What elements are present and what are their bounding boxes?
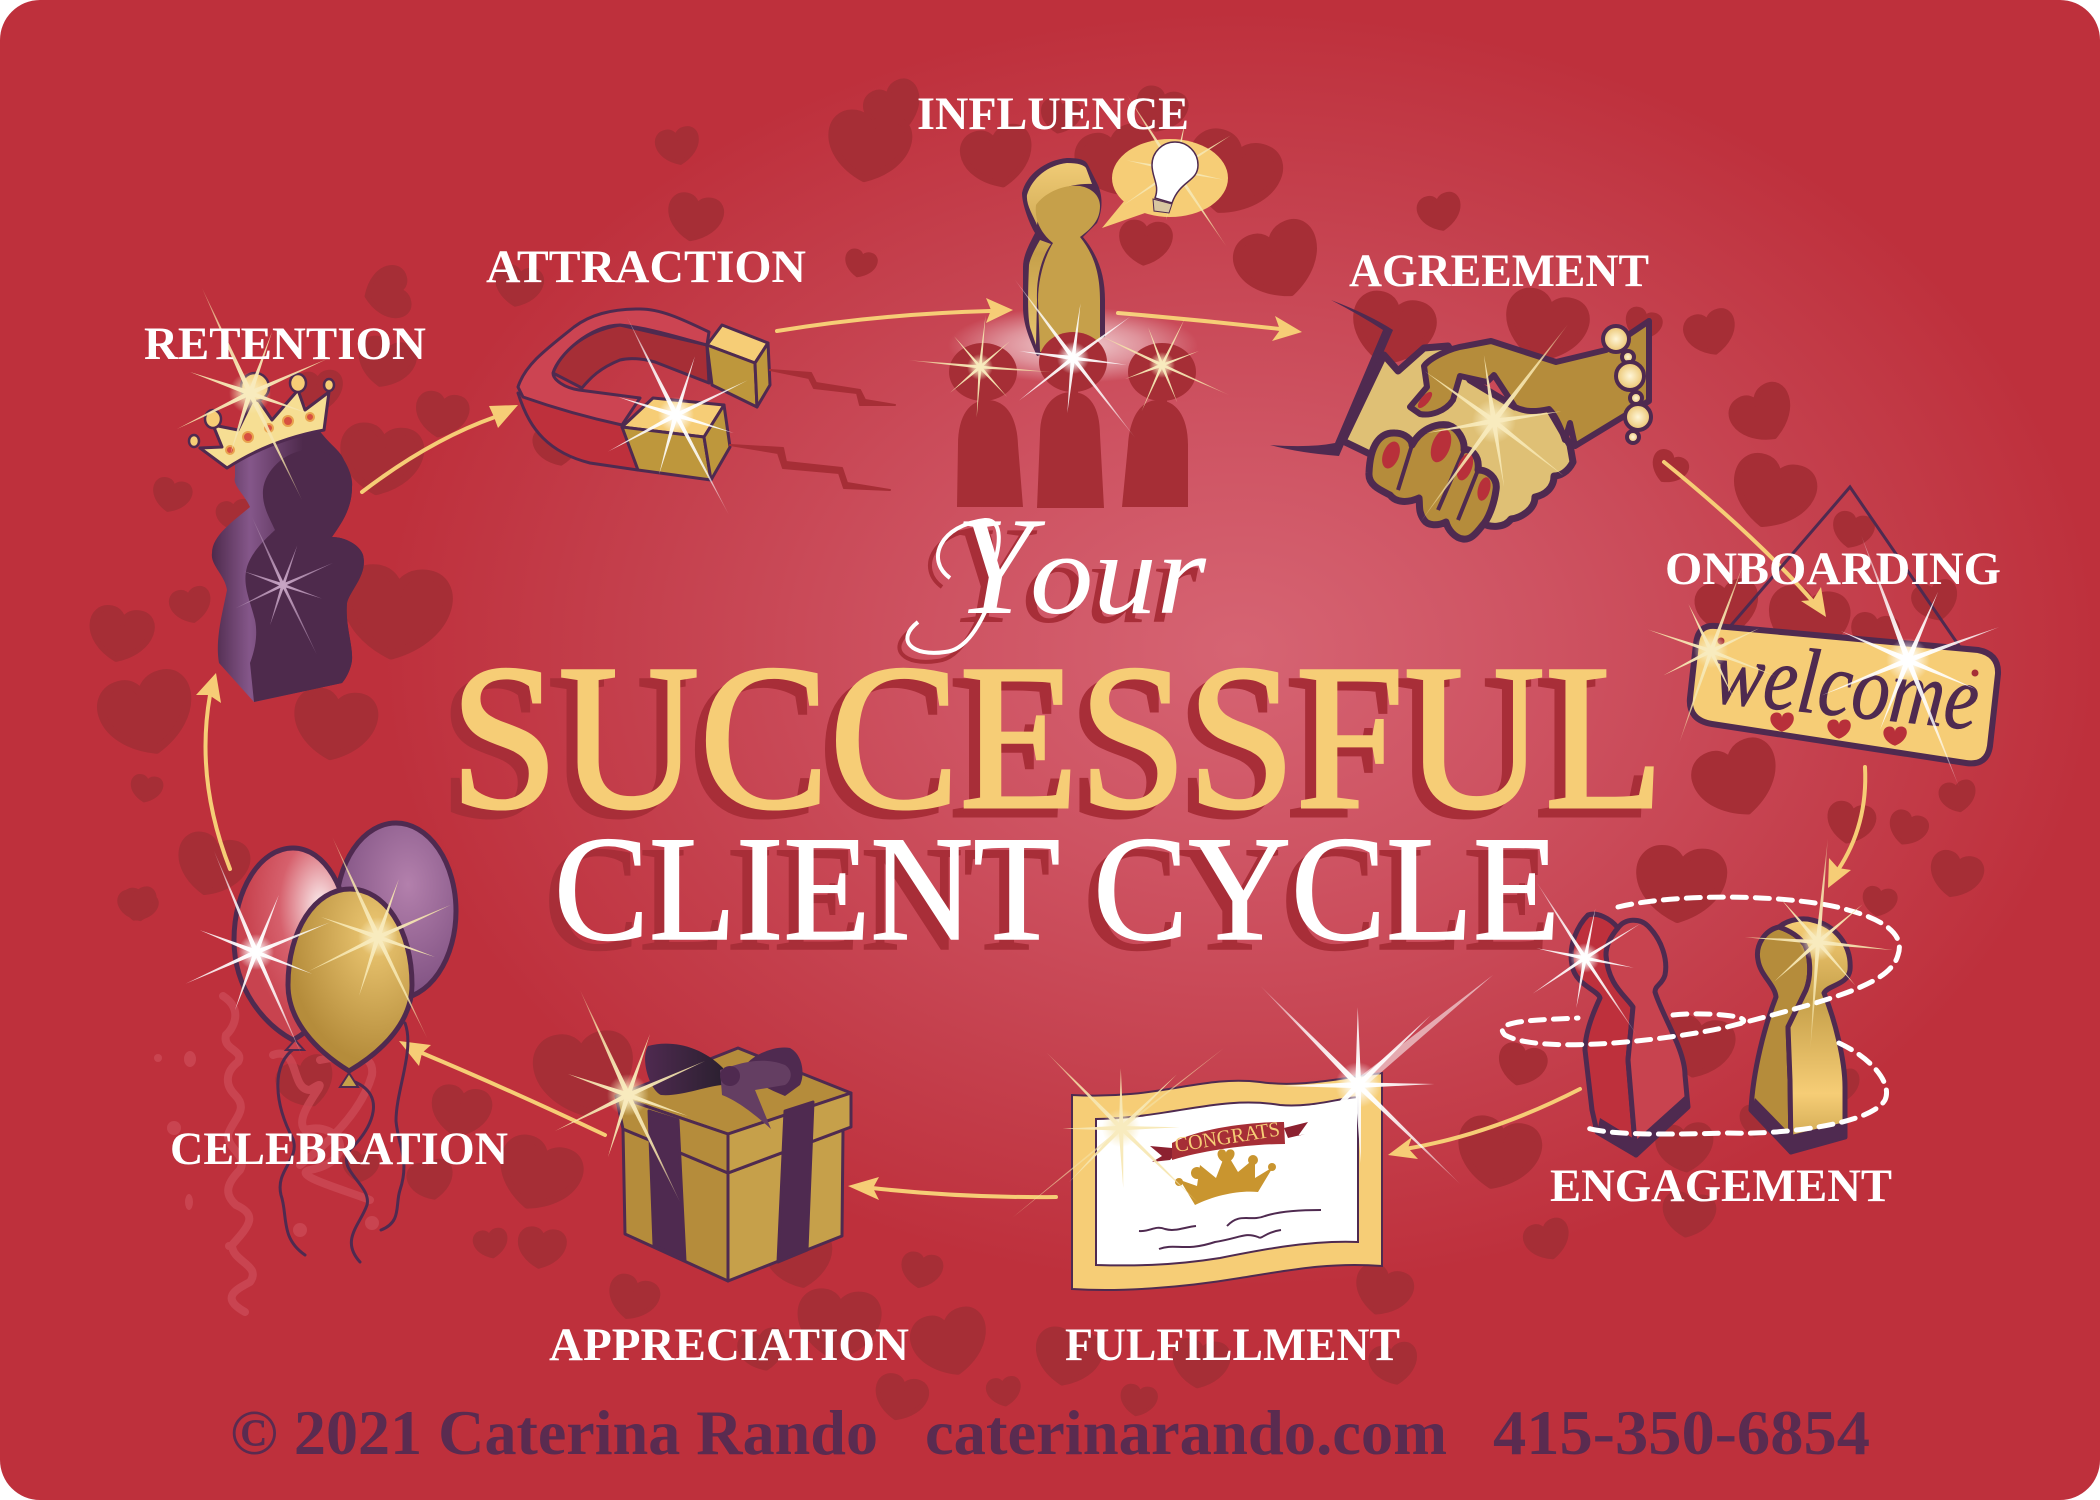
footer contact line xyxy=(230,1397,1870,1468)
icon: pearl bracelet xyxy=(1603,326,1651,443)
footer contact line: caterinarando.com xyxy=(925,1397,1447,1468)
icon: welcome sign xyxy=(1690,487,1998,763)
arrow: fulfillment to appreciation xyxy=(848,1177,1056,1200)
title word: Your: Y xyxy=(955,489,1046,644)
icon: gift sparkle xyxy=(555,990,705,1202)
label: engagement: ENGAGEMENT xyxy=(1550,1160,1892,1212)
panel: engagement xyxy=(1502,827,1925,1212)
panel: agreement xyxy=(1270,245,1651,545)
label: attraction: ATTRACTION xyxy=(486,241,806,293)
arrow: appreciation to celebration xyxy=(399,1041,605,1135)
label: retention: RETENTION xyxy=(144,318,426,370)
center title xyxy=(439,489,1664,982)
panel: influence xyxy=(901,81,1246,508)
arrow: attraction to influence xyxy=(777,298,1013,331)
icon: sign sparkles xyxy=(1607,534,2005,789)
icon: balloons xyxy=(234,823,456,1087)
panel: appreciation xyxy=(549,990,909,1371)
title words: CLIENT CYCLE: CLIENT CYCLE xyxy=(544,816,1550,982)
arrow: agreement to onboarding xyxy=(1664,462,1826,617)
title word: Your xyxy=(899,489,1207,662)
footer contact line: 415-350-6854 xyxy=(1493,1397,1870,1468)
icon: audience xyxy=(949,332,1196,508)
icon: magnet sparkle xyxy=(603,313,753,519)
arrow: celebration to retention xyxy=(196,673,230,869)
icon: glow xyxy=(948,307,1198,383)
icon: purple figure xyxy=(212,430,364,702)
label: celebration: CELEBRATION xyxy=(170,1123,508,1175)
panel: retention xyxy=(144,288,426,702)
arrow: onboarding to engagement xyxy=(1828,767,1865,888)
footer contact line: © 2021 Caterina Rando xyxy=(230,1397,878,1468)
icon: balloon strings xyxy=(278,1023,408,1262)
panel: celebration xyxy=(154,823,508,1312)
label: onboarding: ONBOARDING xyxy=(1665,543,2001,595)
title word: Your: our xyxy=(1030,511,1207,639)
icon: retention sparkles xyxy=(177,288,333,655)
certificate text lines xyxy=(1139,1210,1321,1249)
icon: gold person xyxy=(1022,158,1105,356)
label: influence: INFLUENCE xyxy=(917,88,1189,140)
ribbon banner xyxy=(1150,1117,1308,1162)
icon: magnet xyxy=(518,309,770,480)
crown emblem xyxy=(1175,1149,1276,1205)
title words: CLIENT CYCLE: CLIENT CYCLE xyxy=(554,806,1560,972)
icon: speech bubble with bulb xyxy=(1102,81,1246,261)
icon: crown xyxy=(189,373,334,468)
icon: balloon sparkles xyxy=(183,837,451,1056)
icon: dashed orbit rings xyxy=(1502,897,1899,1134)
label: appreciation: APPRECIATION xyxy=(549,1319,909,1371)
title word: Your: our xyxy=(1022,520,1199,648)
icon: gift box xyxy=(616,1048,851,1281)
icon: magnet force lines xyxy=(730,370,895,490)
icon: bow xyxy=(645,1044,803,1129)
icon: handshake xyxy=(1270,300,1649,539)
icon: certificate sparkles xyxy=(1012,935,1493,1243)
title word: SUCCESSFUL: SUCCESSFUL xyxy=(439,631,1653,861)
arrow: influence to agreement xyxy=(1118,313,1302,341)
icon: gold figure xyxy=(1751,919,1850,1152)
arrow: engagement to fulfillment xyxy=(1388,1089,1580,1159)
ribbon banner: CONGRATS xyxy=(1173,1117,1281,1157)
panel: onboarding xyxy=(1607,487,2005,789)
icon: handshake sparkle xyxy=(1359,302,1629,545)
title word: SUCCESSFUL: SUCCESSFUL xyxy=(450,622,1664,852)
icon: welcome sign: welcome xyxy=(1709,620,1984,750)
label: fulfillment: FULFILLMENT xyxy=(1065,1319,1400,1371)
icon: streamers and confetti xyxy=(154,996,379,1312)
title word: Your: Y xyxy=(947,498,1038,653)
icon: red figure xyxy=(1571,914,1688,1155)
icon: certificate xyxy=(1072,1073,1382,1290)
panel: attraction xyxy=(486,241,895,519)
label: agreement: AGREEMENT xyxy=(1349,245,1649,297)
icon: sparkles on audience xyxy=(901,257,1241,460)
arrow: retention to attraction xyxy=(362,405,518,492)
icon: engagement sparkles xyxy=(1517,827,1925,1060)
panel: fulfillment xyxy=(1012,935,1493,1371)
